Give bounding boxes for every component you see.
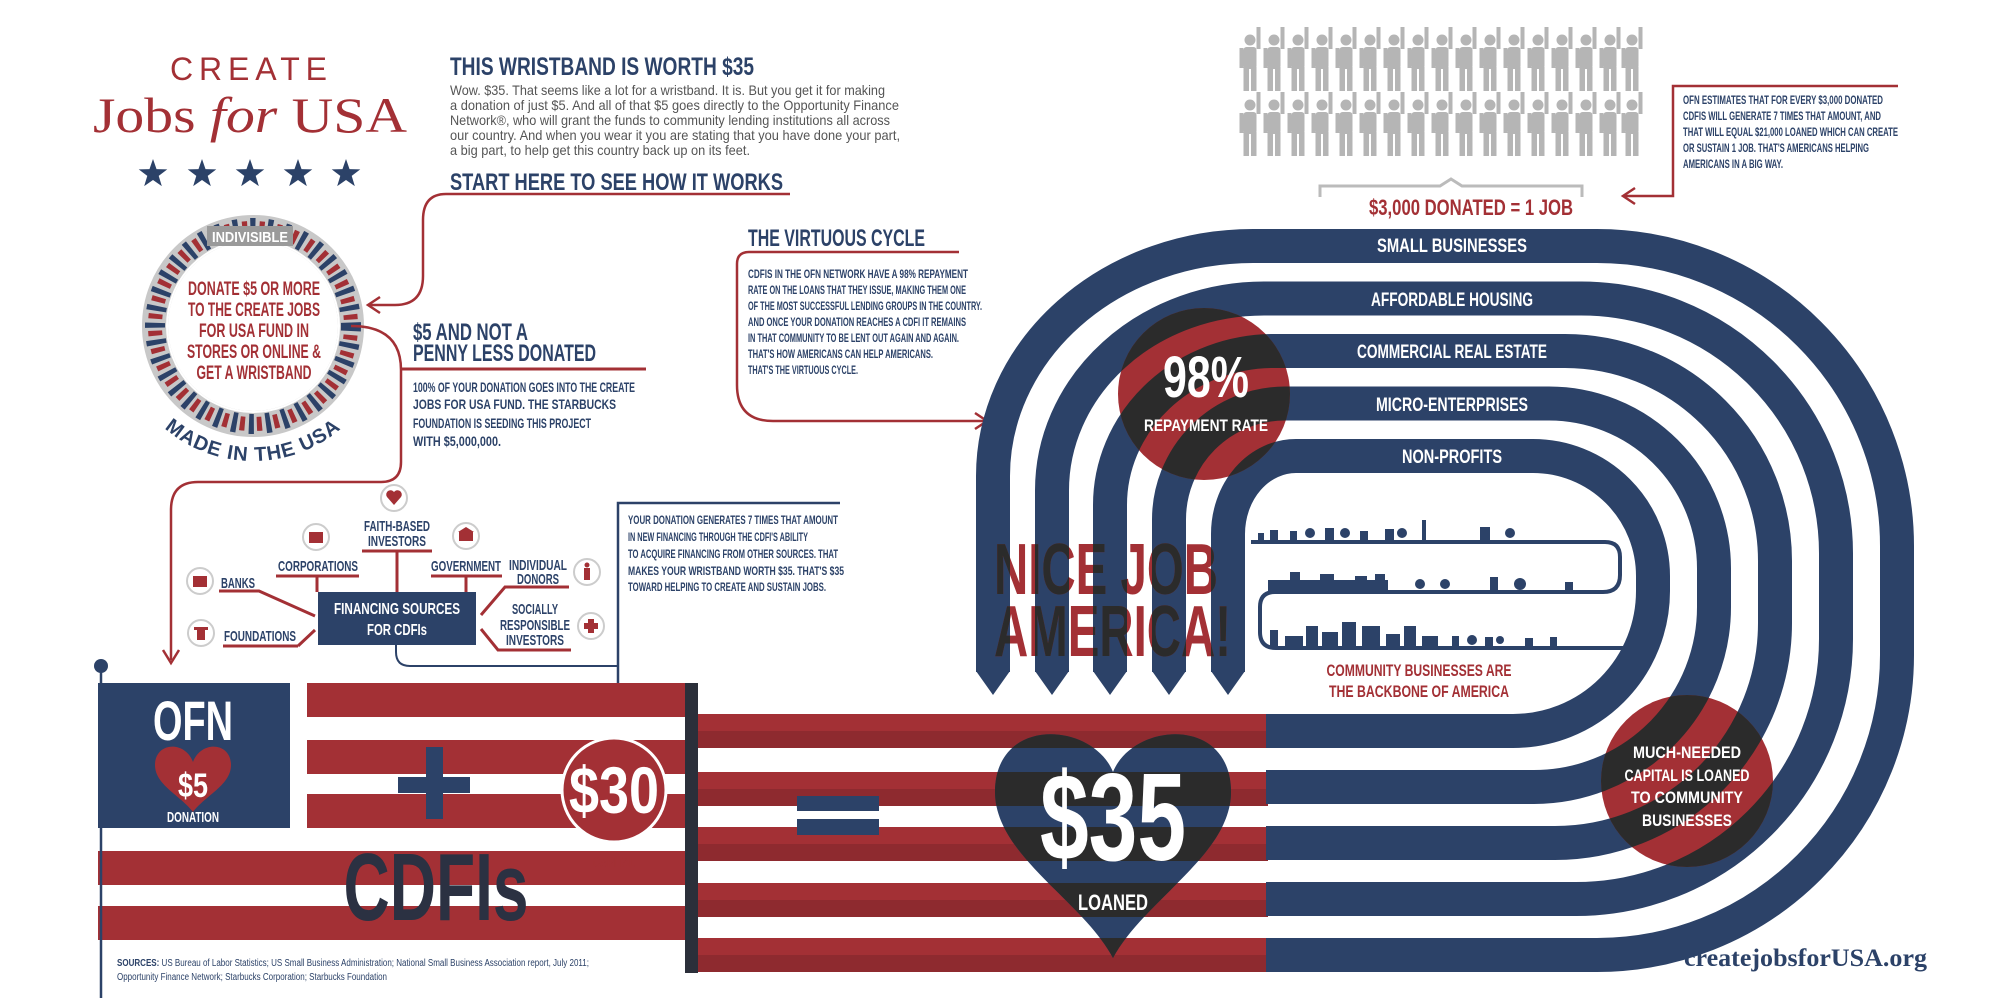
sources: SOURCES: US Bureau of Labor Statistics; US Small Business Administration; National Small Business Association report, July 2011;: [117, 958, 589, 969]
arrow: ofn estimate: [1623, 86, 1898, 204]
text: virtuous cycle: RATE ON THE LOANS THAT THEY ISSUE, MAKING THEM ONE: [748, 283, 966, 297]
wristband text: STORES OR ONLINE &: [187, 342, 321, 363]
title: CREATE: [170, 51, 330, 87]
text: ofn estimate: OR SUSTAIN 1 JOB. THAT'S AMERICANS HELPING: [1683, 143, 1869, 155]
stars: [139, 159, 360, 186]
OFN box: DONATION: [167, 809, 219, 826]
CDFIs label: CDFIs: [344, 834, 528, 941]
OFN box: $5: [178, 767, 208, 805]
financing sources network: GOVERNMENT: [431, 558, 501, 575]
text box: seven times: YOUR DONATION GENERATES 7 TIMES THAT AMOUNT: [628, 513, 838, 527]
text: ofn estimate: OFN ESTIMATES THAT FOR EVERY $3,000 DONATED: [1683, 95, 1883, 107]
caption: community businesses: THE BACKBONE OF AMERICA: [1329, 682, 1509, 701]
financing sources network: RESPONSIBLE: [500, 617, 570, 634]
wristband text: GET A WRISTBAND: [196, 363, 312, 384]
wristband text: [187, 279, 321, 384]
OFN box: OFN: [153, 689, 233, 752]
financing sources network: DONORS: [517, 571, 559, 588]
text: virtuous cycle: AND ONCE YOUR DONATION REACHES A CDFI IT REMAINS: [748, 315, 966, 329]
wristband text: TO THE CREATE JOBS: [188, 300, 320, 321]
text: wristband intro: Wow. $35. That seems like a lot for a wristband. It is. But you get it for making: [450, 82, 885, 98]
financing sources network: [187, 485, 604, 650]
text: 100% donation: WITH $5,000,000.: [413, 433, 501, 449]
title: Jobs for USA: [93, 87, 407, 143]
caption: community businesses: [1326, 661, 1512, 701]
text box: seven times: TO ACQUIRE FINANCING FROM OTHER SOURCES. THAT: [628, 547, 838, 561]
arrow: wristband to OFN: [163, 326, 401, 663]
label: 3000 donated: $3,000 DONATED = 1 JOB: [1369, 195, 1573, 220]
plus sign: [398, 747, 470, 819]
circle: 30 capital: [562, 738, 666, 871]
circle: 30 capital: $30: [569, 753, 659, 827]
heart: 35 loaned: [995, 734, 1231, 958]
text: wristband intro: a big part, to help get this country back up on its feet.: [450, 142, 750, 158]
text: virtuous cycle: [748, 267, 982, 377]
text: ofn estimate: [1683, 95, 1898, 171]
nice job america: AMERICA!: [994, 592, 1231, 672]
band labels: AFFORDABLE HOUSING: [1371, 290, 1533, 311]
text: wristband intro: Network®, who will grant the funds to community lending institutions all across: [450, 112, 890, 128]
text: wristband intro: our country. And when you wear it you are stating that you have done your part,: [450, 127, 900, 143]
band arrow tips: [976, 671, 1245, 695]
label: indivisible: INDIVISIBLE: [212, 229, 288, 246]
sources: Opportunity Finance Network; Starbucks Corporation; Starbucks Foundation: [117, 972, 387, 983]
text: ofn estimate: THAT WILL EQUAL $21,000 LOANED WHICH CAN CREATE: [1683, 127, 1898, 139]
text: 100% donation: JOBS FOR USA FUND. THE STARBUCKS: [413, 396, 616, 412]
circle: 98% repayment: 98%: [1163, 345, 1249, 410]
wristband text: DONATE $5 OR MORE: [188, 279, 320, 300]
blue track bands: [993, 246, 1897, 955]
sources: [117, 958, 589, 983]
text: 100% donation: [413, 379, 635, 449]
people icons: [1240, 27, 1642, 156]
circle: much-needed capital: TO COMMUNITY: [1631, 788, 1744, 807]
text box: seven times: [396, 503, 844, 713]
text: 100% donation: FOUNDATION IS SEEDING THIS PROJECT: [413, 415, 591, 431]
nice job america: NICE JOB: [994, 530, 1218, 610]
town illustration: [1251, 520, 1625, 648]
text box: seven times: IN NEW FINANCING THROUGH THE CDFI'S ABILITY: [628, 530, 808, 544]
text: wristband intro: a donation of just $5. And all of that $5 goes directly to the Opportunity Finance: [450, 97, 899, 113]
circle: much-needed capital: MUCH-NEEDED: [1633, 743, 1741, 762]
circle: much-needed capital: CAPITAL IS LOANED: [1624, 766, 1750, 785]
band labels: COMMERCIAL REAL ESTATE: [1357, 342, 1547, 363]
band labels: SMALL BUSINESSES: [1377, 236, 1527, 257]
band labels: MICRO-ENTERPRISES: [1376, 395, 1528, 416]
wristband text: FOR USA FUND IN: [199, 321, 309, 342]
middle red stripes: [698, 714, 1282, 972]
heading: start here: START HERE TO SEE HOW IT WORKS: [450, 169, 783, 196]
text: ofn estimate: AMERICANS IN A BIG WAY.: [1683, 159, 1783, 171]
text: virtuous cycle: THAT'S HOW AMERICANS CAN HELP AMERICANS.: [748, 347, 933, 361]
text: virtuous cycle: CDFIS IN THE OFN NETWORK HAVE A 98% REPAYMENT: [748, 267, 968, 281]
url: createjobsforUSA.org: [1684, 945, 1928, 972]
heart: 35 loaned: $35: [1040, 749, 1186, 887]
text: ofn estimate: CDFIS WILL GENERATE 7 TIMES THAT AMOUNT, AND: [1683, 111, 1881, 123]
box: financing sources: FINANCING SOURCES: [334, 601, 460, 618]
flag stripes left: [98, 683, 698, 973]
nice job america: AMERICA!: [994, 592, 1231, 672]
circle: 30 capital: CAPITAL: [593, 854, 635, 871]
bracket: [1320, 179, 1582, 197]
text: wristband intro: [450, 82, 900, 158]
text box: seven times: TOWARD HELPING TO CREATE AND SUSTAIN JOBS.: [628, 580, 826, 594]
made in the usa: MADE IN THE USA: [165, 418, 340, 461]
financing sources network: INDIVIDUAL: [509, 557, 567, 574]
heart: 35 loaned: LOANED: [1078, 890, 1148, 915]
heading: wristband worth: THIS WRISTBAND IS WORTH $35: [450, 53, 754, 81]
circle: 98% repayment: REPAYMENT RATE: [1144, 416, 1268, 435]
box: financing sources: [318, 592, 476, 645]
circle: much-needed capital: [1601, 695, 1773, 867]
financing sources network: INVESTORS: [368, 533, 426, 550]
financing sources network: CORPORATIONS: [278, 558, 358, 575]
box: financing sources: FOR CDFIs: [367, 622, 427, 639]
band labels: [1357, 236, 1547, 468]
circle: much-needed capital: BUSINESSES: [1642, 811, 1732, 830]
circle: 98% repayment: [1118, 308, 1290, 480]
financing sources network: BANKS: [221, 575, 255, 592]
nice job america: NICE JOB: [994, 530, 1218, 610]
financing sources network: FOUNDATIONS: [224, 628, 296, 645]
text: 100% donation: 100% OF YOUR DONATION GOES INTO THE CREATE: [413, 379, 635, 395]
heading: five dollars: [413, 319, 596, 367]
band labels: NON-PROFITS: [1402, 447, 1502, 468]
arrow: start here to wristband: [368, 194, 790, 313]
OFN box: [98, 683, 290, 828]
icons: [187, 485, 604, 646]
heading: five dollars: PENNY LESS DONATED: [413, 340, 596, 367]
caption: community businesses: COMMUNITY BUSINESSES ARE: [1326, 661, 1512, 680]
nice job america: [995, 543, 1226, 656]
financing sources network: FAITH-BASED: [364, 518, 430, 535]
text box: seven times: MAKES YOUR WRISTBAND WORTH $35. THAT'S $35: [628, 564, 844, 578]
equals sign: [797, 796, 879, 835]
text: virtuous cycle: THAT'S THE VIRTUOUS CYCLE.: [748, 363, 858, 377]
financing sources network: INVESTORS: [506, 632, 564, 649]
heading: virtuous cycle: THE VIRTUOUS CYCLE: [748, 225, 925, 252]
text: virtuous cycle: IN THAT COMMUNITY TO BE LENT OUT AGAIN AND AGAIN.: [748, 331, 959, 345]
arrow: virtuous cycle: [737, 252, 987, 429]
title: [93, 51, 407, 143]
heading: five dollars: $5 AND NOT A: [413, 319, 528, 346]
text: virtuous cycle: OF THE MOST SUCCESSFUL LENDING GROUPS IN THE COUNTRY.: [748, 299, 982, 313]
wristband: [142, 215, 364, 461]
flag pole: [94, 659, 108, 998]
financing sources network: SOCIALLY: [512, 601, 558, 618]
